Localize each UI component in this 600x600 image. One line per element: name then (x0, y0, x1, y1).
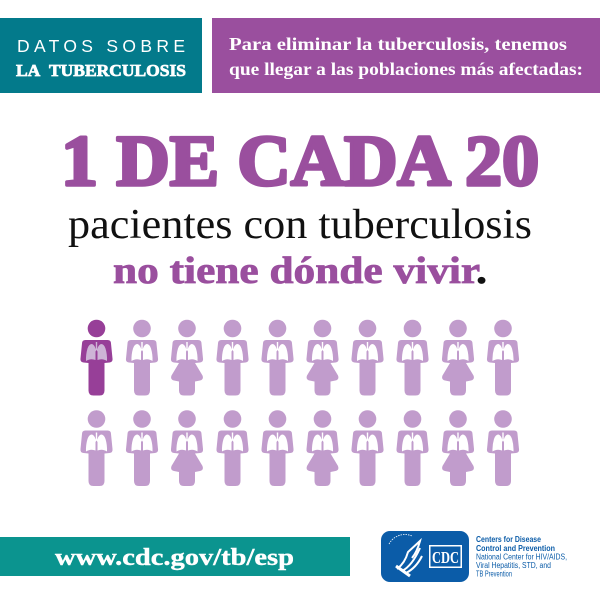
logo: cdc (381, 531, 469, 582)
text: cdc agency: Viral Hepatitis, STD, and (476, 561, 551, 570)
text: cdc agency: National Center for HIV/AIDS, (476, 552, 567, 562)
text: url: www.cdc.gov/tb/esp (55, 544, 294, 571)
panel: datos sobre la tuberculosis (0, 18, 202, 93)
text: cdc agency: Control and Prevention (476, 544, 555, 553)
icon: hhs eagle (389, 535, 422, 576)
text: cdc agency: Centers for Disease (476, 535, 541, 544)
text: no tiene donde vivir: no tiene dónde vivir . (113, 250, 487, 292)
text: cdc agency (476, 535, 567, 578)
icon row 1 (80, 320, 519, 396)
text: pacientes con tuberculosis: pacientes con tuberculosis (68, 202, 532, 248)
heading: datos sobre: DATOS SOBRE (17, 36, 185, 56)
text: cdc agency: TB Prevention (476, 570, 512, 578)
footer bar: url (0, 537, 350, 576)
title: 1 de cada 20: 1 DE CADA 20 (61, 121, 539, 201)
text: intro line 1: Para eliminar la tuberculosis, tenemos (229, 34, 567, 54)
icon row 2 (80, 410, 519, 486)
heading: la tuberculosis: LA TUBERCULOSIS (16, 61, 186, 80)
panel: intro message (212, 18, 600, 93)
chart: 1 of 20 pictogram (80, 320, 519, 486)
text: intro line 2: que llegar a las poblaciones más afectadas: (229, 59, 583, 79)
icon: cdc box: CDC (432, 548, 459, 567)
icon: highlighted person (80, 320, 113, 396)
